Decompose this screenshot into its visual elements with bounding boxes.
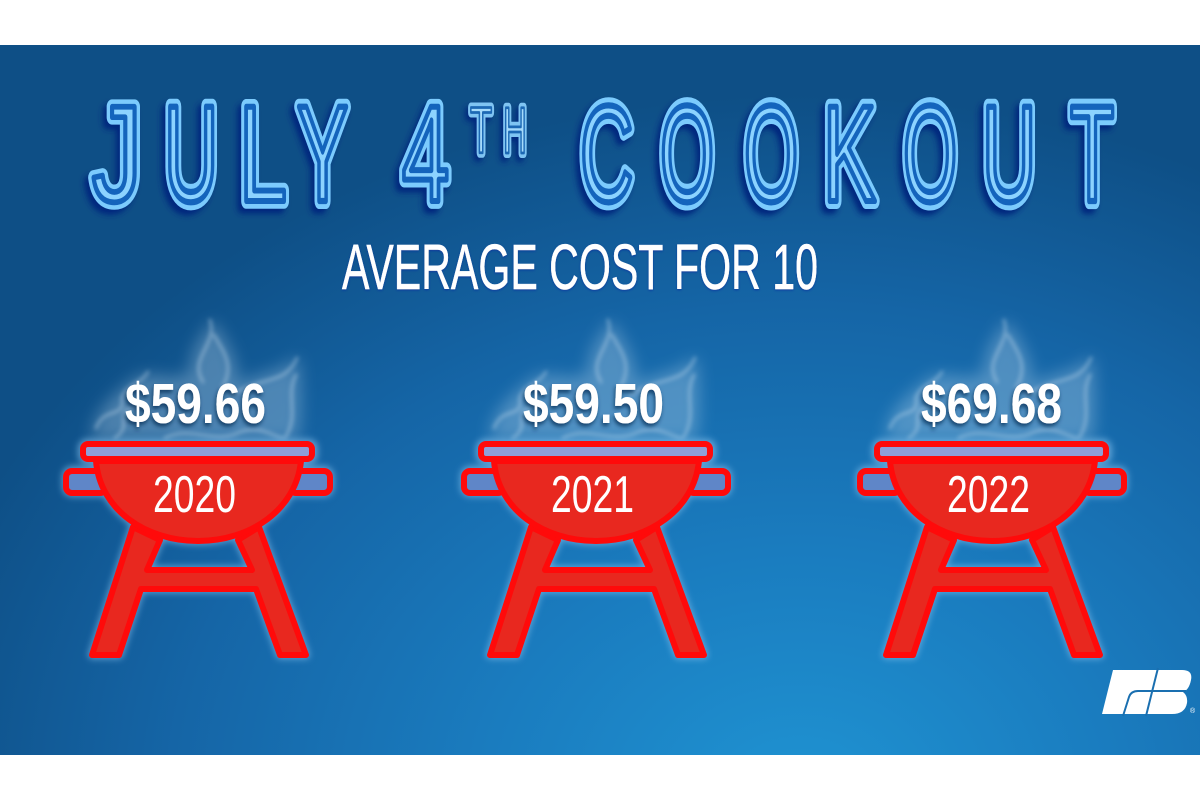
- grill glow: [464, 443, 728, 655]
- title superscript: H: [503, 95, 527, 168]
- title: O: [903, 79, 957, 231]
- title: O: [656, 84, 710, 236]
- title: U: [164, 78, 218, 231]
- year: 2020: [153, 466, 236, 524]
- title superscript: T: [470, 95, 492, 168]
- title: 4: [402, 78, 449, 231]
- grill handles: [464, 471, 728, 493]
- smoke: [92, 320, 301, 440]
- year: 2021: [551, 466, 634, 524]
- grill handles: [860, 471, 1124, 493]
- title: 4: [402, 78, 449, 231]
- grill bowl: [494, 461, 699, 541]
- title: T: [1066, 84, 1110, 236]
- grill rim: [481, 444, 710, 459]
- grill glow: [860, 443, 1124, 655]
- title: Y: [297, 76, 348, 231]
- title: O: [899, 84, 953, 236]
- title: C: [576, 83, 629, 236]
- grill rim: [83, 444, 312, 459]
- price: $69.68: [921, 372, 1062, 436]
- title: J: [92, 78, 142, 231]
- title superscript: H: [500, 99, 524, 172]
- title: Y: [297, 76, 348, 231]
- grill legs: [886, 527, 1100, 655]
- price: $59.50: [523, 372, 664, 436]
- title: U: [164, 78, 218, 231]
- title: U: [160, 83, 214, 236]
- title: T: [1070, 79, 1114, 231]
- grill bowl: [890, 461, 1095, 541]
- icon: Farm Bureau logo: ®: [1190, 707, 1196, 715]
- grill legs: [490, 527, 704, 655]
- title: O: [903, 79, 957, 231]
- panel: 2022 grill: [860, 320, 1124, 655]
- title: K: [823, 77, 876, 230]
- title: J: [92, 78, 142, 231]
- title: O: [744, 79, 798, 231]
- title: 4: [398, 83, 445, 236]
- title: T: [1070, 79, 1114, 231]
- panel: 2021 grill: [464, 320, 728, 655]
- grill legs: [92, 527, 306, 655]
- title: J: [88, 83, 138, 236]
- title superscript: [467, 95, 527, 172]
- title: O: [740, 84, 794, 236]
- title: K: [819, 82, 872, 235]
- price: $59.66: [125, 372, 266, 436]
- title: U: [982, 78, 1036, 231]
- year: 2022: [947, 466, 1030, 524]
- title superscript: T: [470, 95, 492, 168]
- grill bowl: [96, 461, 301, 541]
- title superscript: T: [467, 99, 489, 172]
- title: K: [823, 77, 876, 230]
- smoke: [490, 320, 699, 440]
- title: C: [580, 78, 633, 231]
- title: L: [239, 78, 287, 231]
- title: O: [660, 79, 714, 231]
- title: U: [982, 78, 1036, 231]
- subtitle: AVERAGE COST FOR 10: [342, 231, 818, 303]
- icon: Farm Bureau logo: [1102, 668, 1196, 716]
- title: Y: [293, 81, 344, 236]
- smoke: [886, 320, 1095, 440]
- grill glow: [66, 443, 330, 655]
- title: O: [744, 79, 798, 231]
- grill rim: [877, 444, 1106, 459]
- title: L: [239, 78, 287, 231]
- title: C: [580, 78, 633, 231]
- title: L: [235, 83, 283, 236]
- title superscript: H: [503, 95, 527, 168]
- panel: 2020 grill: [66, 320, 330, 655]
- title: O: [660, 79, 714, 231]
- title: U: [978, 83, 1032, 236]
- grill handles: [66, 471, 330, 493]
- title: [88, 76, 1114, 236]
